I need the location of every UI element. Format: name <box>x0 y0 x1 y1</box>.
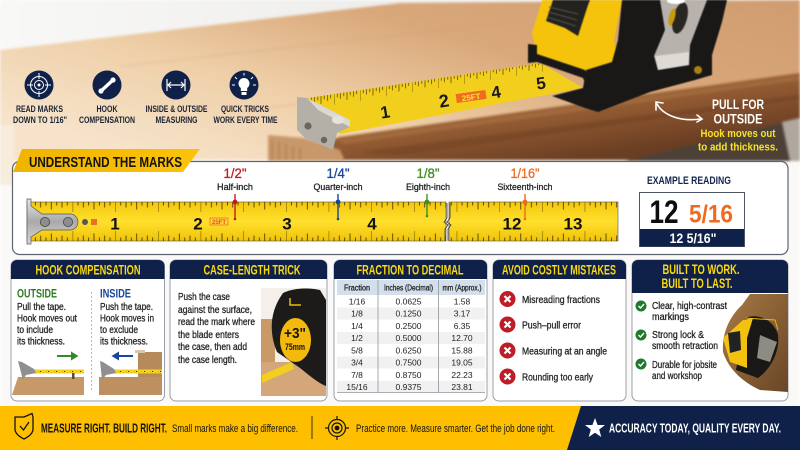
label: work every time: WORK EVERY TIME <box>214 115 278 126</box>
mistake list: Measuring at an angle <box>522 346 607 358</box>
inside text: to exclude <box>100 325 138 336</box>
inside text: its thickness. <box>100 336 148 348</box>
table: 0.5000 <box>396 333 422 343</box>
table: 5/8 <box>351 346 363 356</box>
arrow: curved double arrow <box>656 102 702 122</box>
checklist <box>636 300 727 382</box>
table: 7/8 <box>351 370 363 380</box>
table: 0.6250 <box>396 346 422 356</box>
marker: quarter-inch <box>314 165 362 220</box>
table: 1/2 <box>351 333 363 343</box>
top icon row <box>13 70 278 126</box>
mistake list <box>500 291 607 384</box>
table <box>337 280 485 392</box>
marker: half-inch: Half-inch <box>217 182 253 193</box>
marker: eighth-inch <box>406 165 450 217</box>
table: 0.8750 <box>396 370 422 380</box>
arrow: green right <box>57 352 78 360</box>
outside text: to include <box>17 325 53 336</box>
hero tape case <box>528 0 727 112</box>
table: 1/8 <box>351 308 363 318</box>
marker: sixteenth-inch: Sixteenth-inch <box>498 182 552 193</box>
hero tape blade: 2 <box>437 90 451 112</box>
icon: shield <box>15 414 33 439</box>
table: 6.35 <box>454 321 471 331</box>
checklist: markings <box>652 312 689 323</box>
marker: sixteenth-inch: 1/16" <box>510 165 540 181</box>
callout: pull for outside: OUTSIDE <box>714 112 762 126</box>
icon: star <box>585 418 605 437</box>
illustration: inside hook <box>99 350 162 395</box>
footer band <box>0 406 800 450</box>
table: mm (Approx.) <box>442 284 482 292</box>
ruler: tape blade: 13 <box>564 214 582 234</box>
table: 0.0625 <box>396 296 422 306</box>
hero hook <box>297 97 350 150</box>
marker: half-inch <box>217 165 253 220</box>
callout: pull for outside <box>656 97 778 154</box>
heading: BUILT TO WORK. <box>662 261 740 277</box>
heading banner: UNDERSTAND THE MARKS <box>29 154 182 171</box>
table: 0.1250 <box>396 308 422 318</box>
marker: sixteenth-inch <box>498 165 552 220</box>
body text: Push the case <box>178 292 230 303</box>
illustration: outside hook <box>12 361 84 395</box>
label: hook: HOOK <box>96 104 118 115</box>
panel: hook compensation <box>11 260 164 401</box>
table: 12.70 <box>451 333 473 343</box>
hero tape blade <box>308 63 583 134</box>
outside text: Hook moves out <box>17 314 77 324</box>
heading: HOOK COMPENSATION <box>36 262 140 278</box>
heading: FRACTION TO DECIMAL <box>356 262 464 278</box>
illustration: case with +3 inch label: 75mm <box>285 342 305 352</box>
checklist: Strong lock & <box>652 330 704 341</box>
outside text: its thickness. <box>17 336 65 348</box>
icon: target, read marks <box>24 70 54 100</box>
ruler hook <box>27 199 78 244</box>
checklist: Durable for jobsite <box>652 360 717 371</box>
footer note one: Small marks make a big difference. <box>172 423 298 435</box>
mistake list: Misreading fractions <box>522 295 600 306</box>
ruler: tape blade: 3 <box>282 214 292 234</box>
table: 0.7500 <box>396 358 422 368</box>
illustration: case with +3 inch label: +3" <box>284 325 306 342</box>
heading line two: BUILT TO LAST. <box>662 275 732 291</box>
footer note two: Practice more. Measure smarter. Get the job done right. <box>356 423 555 435</box>
label: quick tricks: QUICK TRICKS <box>221 104 269 115</box>
marker: quarter-inch: Quarter-inch <box>314 182 362 193</box>
ruler: tape blade: 25FT <box>212 220 226 226</box>
ruler: tape blade: 2 <box>193 214 203 234</box>
inside text: Push the tape. <box>100 302 153 313</box>
label: read marks: READ MARKS <box>16 104 63 115</box>
ruler: tape blade <box>27 202 618 241</box>
icon: hook <box>92 70 122 100</box>
body text: the blade enters <box>178 330 239 341</box>
table: 0.2500 <box>396 321 422 331</box>
outside text: Pull the tape. <box>17 302 66 313</box>
table: 1/16 <box>349 296 366 306</box>
mistake list: Push–pull error <box>522 320 582 332</box>
table: 19.05 <box>451 358 473 368</box>
table: 3.17 <box>454 308 471 318</box>
body text: the case length. <box>178 355 237 366</box>
table: 3/4 <box>351 358 363 368</box>
body text: read the mark where <box>178 317 255 328</box>
icon: inside outside measure <box>162 70 190 100</box>
hero tape blade: 5 <box>535 73 547 94</box>
checklist: smooth retraction <box>652 341 718 352</box>
table: 15/16 <box>346 382 368 392</box>
marker: quarter-inch: 1/4" <box>326 165 350 181</box>
body text <box>178 292 255 366</box>
arrow: blue left <box>112 352 133 360</box>
panel: avoid costly mistakes <box>493 260 626 401</box>
table: 22.23 <box>451 370 473 380</box>
label: down to 1/16: DOWN TO 1/16" <box>13 115 67 126</box>
mistake list: Rounding too early <box>522 372 593 384</box>
hero tape blade: 1 <box>379 102 391 123</box>
checklist: Clear, high-contrast <box>652 301 727 312</box>
heading: CASE-LENGTH TRICK <box>204 262 301 278</box>
callout: pull for outside: Hook moves out <box>700 128 776 140</box>
table: 23.81 <box>451 382 473 392</box>
example reading <box>640 175 744 246</box>
panel: case-length trick <box>170 260 327 401</box>
illustration: gloved hand with tape <box>723 294 788 392</box>
marker: eighth-inch: 1/8" <box>416 165 440 181</box>
example reading: EXAMPLE READING <box>647 175 731 187</box>
table: Inches (Decimal) <box>384 284 433 292</box>
ruler: tape blade: 1 <box>110 214 120 234</box>
example reading: 12 5/16" <box>670 231 716 246</box>
table: 0.9375 <box>396 382 422 392</box>
inside text: INSIDE <box>100 286 131 300</box>
panel: fraction to decimal <box>334 260 487 401</box>
hero tape blade: 4 <box>490 82 503 103</box>
ruler: tape blade: 12 <box>503 214 521 234</box>
ruler: tape blade: 4 <box>367 214 377 234</box>
icon: light bulb <box>230 70 258 100</box>
outside text: OUTSIDE <box>17 286 57 300</box>
callout: pull for outside: to add thickness. <box>698 142 778 154</box>
illustration: case with +3 inch label <box>261 288 326 396</box>
marker: half-inch: 1/2" <box>224 165 247 181</box>
heading banner <box>13 149 200 172</box>
table: 1.58 <box>454 296 471 306</box>
checklist: and workshop <box>652 371 702 382</box>
callout: pull for outside: PULL FOR <box>712 97 764 112</box>
hero tape blade: 25FT <box>461 92 481 103</box>
panel: understand the marks <box>12 149 788 254</box>
inside text: Hook moves in <box>100 314 154 324</box>
icon: footer target <box>325 416 349 440</box>
body text: the case, then add <box>178 342 247 353</box>
table: Fraction <box>344 284 370 292</box>
marker: eighth-inch: Eighth-inch <box>406 182 450 193</box>
outside text <box>17 286 77 348</box>
inside text <box>100 286 154 348</box>
example reading: 12 <box>650 194 678 230</box>
body text: against the surface, <box>178 305 252 316</box>
table: 1/4 <box>351 321 363 331</box>
example reading: 5/16 <box>689 200 733 228</box>
label: inside and outside: INSIDE & OUTSIDE <box>146 104 208 115</box>
panel: built to work <box>632 260 788 401</box>
label: compensation: COMPENSATION <box>79 115 135 126</box>
label: measuring: MEASURING <box>156 115 198 126</box>
heading: AVOID COSTLY MISTAKES <box>502 262 616 278</box>
footer slogan: MEASURE RIGHT. BUILD RIGHT. <box>41 420 167 436</box>
table: 15.88 <box>451 346 473 356</box>
